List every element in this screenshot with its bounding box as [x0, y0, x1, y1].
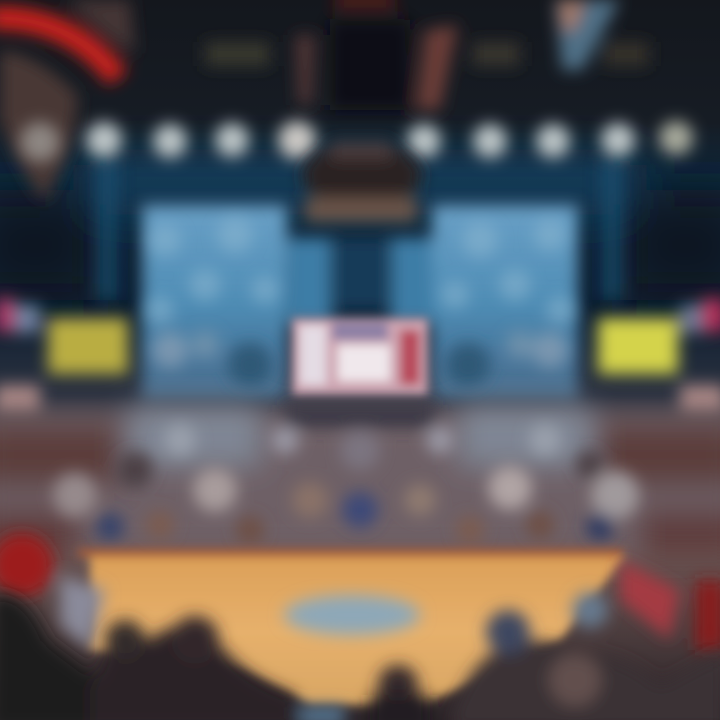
crowd stands base [0, 405, 720, 555]
blue screens [142, 205, 578, 400]
center screen [292, 318, 428, 396]
foreground spectator silhouettes [0, 592, 720, 720]
screen mottled texture [146, 217, 574, 324]
screen lower dark and grey patches [152, 331, 568, 387]
top-left red arc and hoop shape [0, 0, 135, 200]
row of arena lights [20, 121, 693, 162]
crowd mottling [53, 405, 639, 544]
basketball court [78, 549, 625, 705]
center hanging scoreboard [302, 142, 422, 222]
yellow side panels [0, 298, 720, 415]
light beams [95, 160, 624, 300]
upper side darkness and blue glow [0, 165, 720, 300]
center court circle [284, 595, 420, 635]
ceiling banners and rafters [205, 0, 649, 110]
courtside accents [0, 533, 720, 650]
